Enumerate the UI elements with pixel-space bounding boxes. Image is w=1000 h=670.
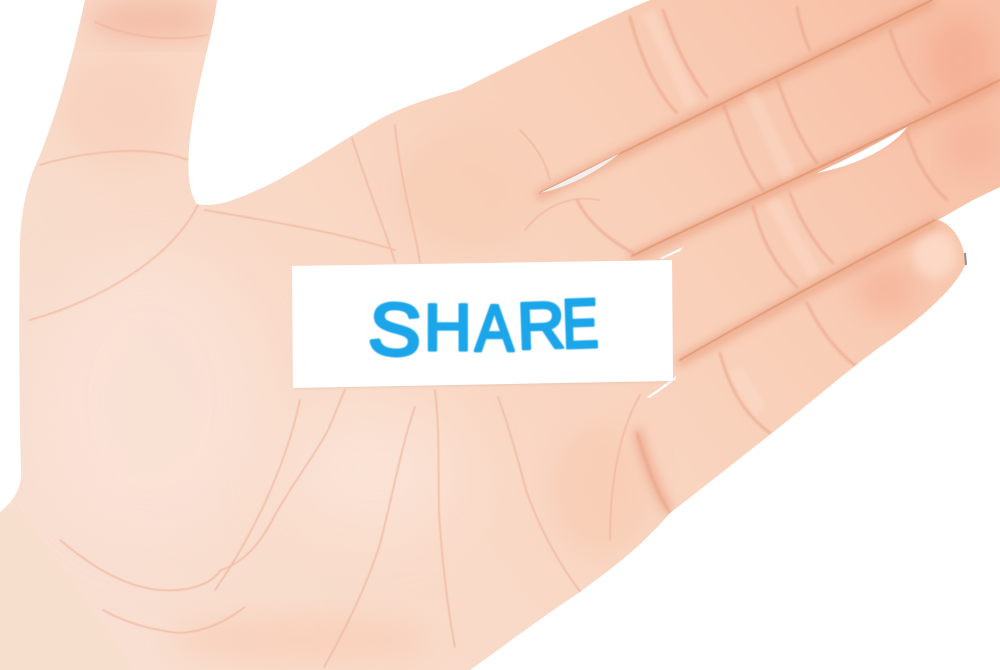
thumb top warm tone bbox=[85, 0, 215, 40]
word: SHARE: R bbox=[516, 287, 566, 363]
thumb middle tone bbox=[70, 69, 164, 156]
knuckle creases bbox=[577, 7, 947, 513]
wrist tone bbox=[2, 508, 4, 510]
paper label bbox=[292, 260, 673, 388]
word: SHARE bbox=[366, 285, 600, 373]
knuckle light bands bbox=[646, 12, 818, 275]
thumb pad light tone bbox=[80, 274, 248, 480]
lower palm warm tone bbox=[556, 435, 642, 550]
finger warm tones bbox=[928, 20, 992, 97]
finger gap lines bbox=[540, 0, 1000, 360]
fingernail edge bbox=[965, 253, 966, 265]
palm light area bbox=[303, 410, 446, 524]
white gaps between fingers bbox=[540, 153, 620, 193]
word: SHARE: A bbox=[475, 293, 514, 366]
palm and thumb creases bbox=[30, 22, 640, 667]
palm top warm tone bbox=[410, 163, 485, 232]
word: SHARE: S bbox=[366, 288, 424, 373]
word: SHARE: H bbox=[424, 290, 472, 364]
word: SHARE: E bbox=[561, 285, 600, 364]
paper label shadow bbox=[295, 378, 674, 389]
bottom warm tone bbox=[170, 615, 430, 665]
finger gap shadows bbox=[540, 2, 998, 510]
